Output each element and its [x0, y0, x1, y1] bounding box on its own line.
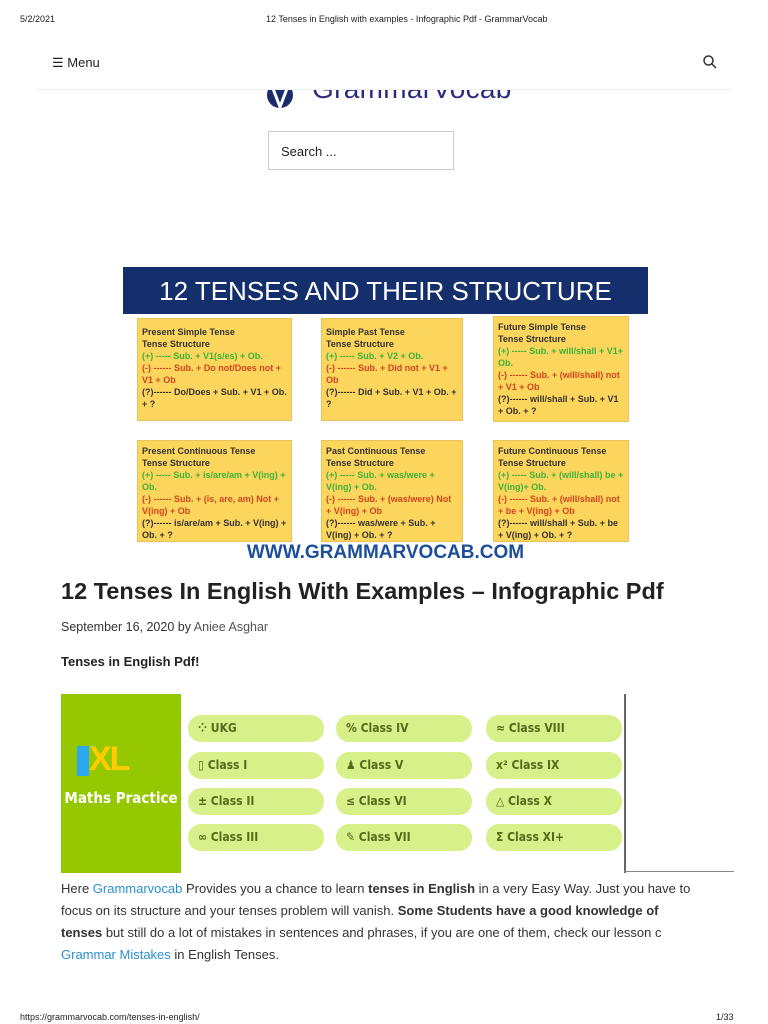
- article title: 12 Tenses In English With Examples – Infographic Pdf: [61, 578, 664, 604]
- card: present simple: [137, 318, 292, 421]
- ad: IXL maths practice: x² Class IX: [496, 758, 559, 772]
- card: future continuous: Future Continuous Tense: [498, 446, 606, 456]
- footer url: https://grammarvocab.com/tenses-in-english/: [20, 1012, 200, 1022]
- card: past continuous: [321, 440, 463, 542]
- ixl green panel: Maths Practice: [64, 789, 178, 807]
- card: future simple: [493, 316, 629, 422]
- card: future simple: Tense Structure: [498, 334, 566, 344]
- logo: [267, 90, 512, 108]
- card: past continuous: Tense Structure: [326, 458, 394, 468]
- card: present continuous: Tense Structure: [142, 458, 210, 468]
- card: future simple: (?)------ will/shall + Sub. + V1 + Ob. + ?: [498, 394, 619, 416]
- card: past continuous: (+) ----- Sub. + was/were + V(ing) + Ob.: [326, 470, 435, 492]
- card: present simple: Tense Structure: [142, 339, 210, 349]
- card: future continuous: (-) ------ Sub. + (will/shall) not + be + V(ing) + Ob: [498, 494, 620, 516]
- ad: IXL maths practice: ± Class II: [198, 794, 254, 808]
- search box: [268, 131, 454, 170]
- card: simple past: (-) ------ Sub. + Did not + V1 + Ob: [326, 363, 448, 385]
- card: present simple: (?)------ Do/Does + Sub. + V1 + Ob. + ?: [142, 387, 287, 409]
- ixl green panel: XL: [89, 740, 128, 778]
- ad: IXL maths practice: ≤ Class VI: [346, 794, 407, 808]
- body paragraph: Here Grammarvocab Provides you a chance to learn tenses in English in a very Easy Way. Just you have to focus on its structure and your tenses problem will vanish. Some Students have a good knowledge of: [61, 881, 690, 918]
- body paragraph: Grammar Mistakes in English Tenses.: [61, 947, 279, 962]
- card: past continuous: (-) ------ Sub. + (was/were) Not + V(ing) + Ob: [326, 494, 451, 516]
- footer page number: 1/33: [716, 1012, 734, 1022]
- card: present continuous: (-) ------ Sub. + (is, are, am) Not + V(ing) + Ob: [142, 494, 279, 516]
- card: future continuous: (+) ----- Sub. + (will/shall) be + V(ing)+ Ob.: [498, 470, 623, 492]
- card: past continuous: Past Continuous Tense: [326, 446, 425, 456]
- ad: IXL maths practice: ≈ Class VIII: [496, 721, 565, 735]
- website url: WWW.GRAMMARVOCAB.COM: [247, 542, 524, 563]
- banner title: [123, 267, 648, 314]
- card: past continuous: (?)------ was/were + Sub. + V(ing) + Ob. + ?: [326, 518, 436, 540]
- card: simple past: (+) ----- Sub. + V2 + Ob.: [326, 351, 423, 361]
- card: present simple: (+) ----- Sub. + V1(s/es) + Ob.: [142, 351, 263, 361]
- ixl green panel: [61, 694, 181, 873]
- ad: IXL maths practice: [61, 694, 734, 873]
- card: future simple: (+) ----- Sub. + will/shall + V1+ Ob.: [498, 346, 623, 368]
- search box: Search ...: [281, 144, 337, 159]
- card: present continuous: (?)------ is/are/am + Sub. + V(ing) + Ob. + ?: [142, 518, 286, 540]
- card: present continuous: Present Continuous Tense: [142, 446, 255, 456]
- ad: IXL maths practice: % Class IV: [346, 721, 408, 735]
- ad: IXL maths practice: △ Class X: [496, 794, 552, 808]
- header page title: 12 Tenses in English with examples - Infographic Pdf - GrammarVocab: [266, 14, 547, 24]
- ad: IXL maths practice: ▯ Class I: [198, 758, 247, 772]
- subheading: Tenses in English Pdf!: [61, 654, 199, 669]
- body paragraph: tenses but still do a lot of mistakes in sentences and phrases, if you are one of them, check our lesson c: [61, 925, 662, 940]
- header date: 5/2/2021: [20, 14, 55, 24]
- icon: search: [703, 55, 716, 68]
- body paragraph: [61, 881, 690, 962]
- card: present continuous: [137, 440, 292, 542]
- card: present continuous: (+) ----- Sub. + is/are/am + V(ing) + Ob.: [142, 470, 286, 492]
- class pills: [188, 715, 324, 742]
- card: present simple: (-) ------ Sub. + Do not/Does not + V1 + Ob: [142, 363, 281, 385]
- card: simple past: Simple Past Tense: [326, 327, 405, 337]
- card: future simple: Future Simple Tense: [498, 322, 586, 332]
- card: simple past: (?)------ Did + Sub. + V1 + Ob. + ?: [326, 387, 457, 409]
- ad: IXL maths practice: ∞ Class III: [198, 830, 258, 844]
- ad: IXL maths practice: Σ Class XI+: [496, 830, 564, 844]
- banner title: 12 TENSES AND THEIR STRUCTURE: [159, 276, 612, 306]
- ad: IXL maths practice: ♟ Class V: [346, 758, 403, 772]
- menu: ☰ Menu: [52, 55, 100, 70]
- card: future continuous: Tense Structure: [498, 458, 566, 468]
- card: simple past: Tense Structure: [326, 339, 394, 349]
- card: future continuous: [493, 440, 629, 542]
- card: future continuous: (?)------ will/shall + Sub. + be + V(ing) + Ob. + ?: [498, 518, 618, 540]
- infographic: [123, 267, 648, 563]
- card: present simple: Present Simple Tense: [142, 327, 235, 337]
- card: simple past: [321, 318, 463, 421]
- byline: September 16, 2020 by Aniee Asghar: [61, 620, 268, 634]
- ad: IXL maths practice: ✎ Class VII: [346, 830, 411, 844]
- class pills: ⁘ UKG: [198, 721, 237, 735]
- card: future simple: (-) ------ Sub. + (will/shall) not + V1 + Ob: [498, 370, 620, 392]
